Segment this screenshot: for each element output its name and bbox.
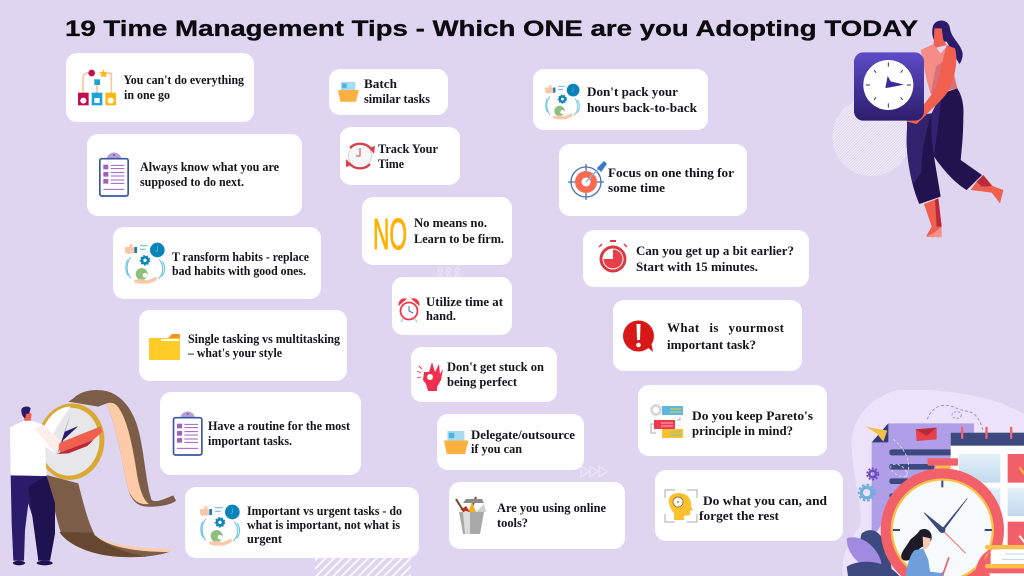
stopwatch (928, 458, 958, 466)
tip text (587, 84, 698, 115)
icon: task flow (78, 69, 116, 105)
tip text (364, 76, 430, 106)
tip text: similar tasks (364, 91, 430, 106)
tip text: forget the rest (699, 508, 780, 523)
decorative stripes and dots (315, 268, 607, 576)
illustration: clock, calendar and woman with laptop (842, 390, 1024, 576)
tip text (172, 249, 309, 278)
icon: Pareto steps (651, 406, 683, 438)
icon: head with focus frame (665, 490, 697, 522)
tip text: Start with 15 minutes. (636, 259, 758, 274)
tip text: Do what you can, and (703, 493, 828, 508)
tip text: in one go (124, 87, 170, 102)
tip text (247, 503, 402, 546)
tip text: Important vs urgent tasks - do (247, 503, 402, 518)
card 8 (340, 127, 460, 185)
icon: yellow folder (149, 334, 180, 360)
tip text: Time (378, 156, 404, 171)
card 1 (66, 53, 254, 122)
tip text (414, 215, 504, 246)
tip text: important tasks. (208, 433, 292, 448)
card 9 (362, 197, 512, 265)
tip text: tools? (497, 515, 528, 530)
icon: clipboard checklist (174, 412, 202, 455)
tip text (447, 359, 545, 389)
tip text: if you can (471, 441, 523, 456)
books (985, 545, 1024, 549)
icon: target and dart (568, 161, 607, 200)
card 14 (533, 69, 708, 130)
tip text: Utilize time at (426, 294, 504, 309)
tip text: Can you get up a bit earlier? (636, 243, 794, 258)
tip text: some time (608, 180, 665, 195)
tip text: urgent (247, 531, 283, 546)
tip text: principle in mind? (692, 423, 793, 438)
tip text (378, 141, 438, 171)
icon: OK hand (417, 362, 443, 391)
tip text: hand. (426, 308, 456, 323)
icon: NO: NO (373, 210, 407, 259)
tip text: – what's your style (187, 345, 282, 360)
tip text: You can't do everything (124, 72, 244, 87)
icon: tool bucket (456, 497, 486, 534)
icon: alarm clock (399, 299, 419, 322)
leaves (860, 530, 892, 576)
tip text: Don't pack your (587, 84, 678, 99)
tip text (208, 418, 351, 448)
tip text (124, 72, 244, 102)
card 5 (160, 392, 361, 475)
tip text: Focus on one thing for (608, 165, 734, 180)
icon: habit cycle (545, 84, 580, 119)
seated woman (901, 529, 932, 561)
tip text: What is yourmost (667, 320, 785, 335)
tip text: important task? (667, 337, 756, 352)
tip text (608, 165, 734, 195)
tip text (667, 320, 785, 352)
card 2 (87, 134, 302, 216)
card 19 (655, 470, 843, 541)
tip text: supposed to do next. (140, 174, 244, 189)
icon: habit cycle (125, 243, 165, 284)
tip text: Always know what you are (140, 159, 279, 174)
card 11 (411, 347, 557, 402)
tip text: T ransform habits - replace (172, 249, 309, 264)
tip text: Batch (364, 76, 398, 91)
tip text: Have a routine for the most (208, 418, 351, 433)
card 10 (392, 277, 512, 335)
icon: folder with papers (338, 82, 359, 102)
illustration: man with giant wristwatch (10, 390, 176, 565)
card 7 (329, 69, 448, 115)
icon: folder with papers (444, 431, 468, 454)
tip text: Are you using online (497, 500, 606, 515)
tip text (636, 243, 794, 274)
icon: stopwatch (599, 240, 627, 272)
tip text: Delegate/outsource (471, 427, 575, 442)
tip text: bad habits with good ones. (172, 263, 306, 278)
illustration: woman holding clock app icon (832, 20, 1003, 237)
tip text (140, 159, 279, 189)
icon: exclamation bubble (623, 320, 654, 352)
tip text (426, 294, 504, 323)
tip text: Single tasking vs multitasking (188, 331, 340, 346)
tip text: hours back-to-back (587, 100, 698, 115)
tip text (692, 408, 813, 438)
tip text: being perfect (447, 374, 518, 389)
card 4 (139, 310, 347, 381)
tip text: Don't get stuck on (447, 359, 545, 374)
card 6 (185, 487, 419, 558)
icon: clipboard checklist (100, 153, 128, 196)
card 13 (449, 482, 625, 549)
tip text: No means no. (414, 215, 487, 230)
icon: habit cycle (200, 505, 240, 546)
card 12 (437, 414, 584, 470)
card 16 (583, 230, 809, 287)
title: 19 Time Management Tips - Which ONE are you Adopting TODAY (65, 16, 918, 41)
tip text (497, 500, 606, 530)
hatched circle (832, 97, 911, 176)
clock app icon (854, 52, 924, 121)
tip text: Track Your (378, 141, 438, 156)
icon: clock with arrows (346, 144, 375, 168)
card 18 (638, 385, 827, 456)
card 15 (559, 144, 747, 216)
tip text: Do you keep Pareto's (692, 408, 813, 423)
tip text: Learn to be firm. (414, 231, 504, 246)
card 3 (113, 227, 321, 299)
tip text (699, 493, 828, 523)
tip text (471, 427, 575, 456)
card 17 (613, 300, 802, 371)
tip text (187, 331, 340, 360)
tip text: what is important, not what is (247, 517, 400, 532)
